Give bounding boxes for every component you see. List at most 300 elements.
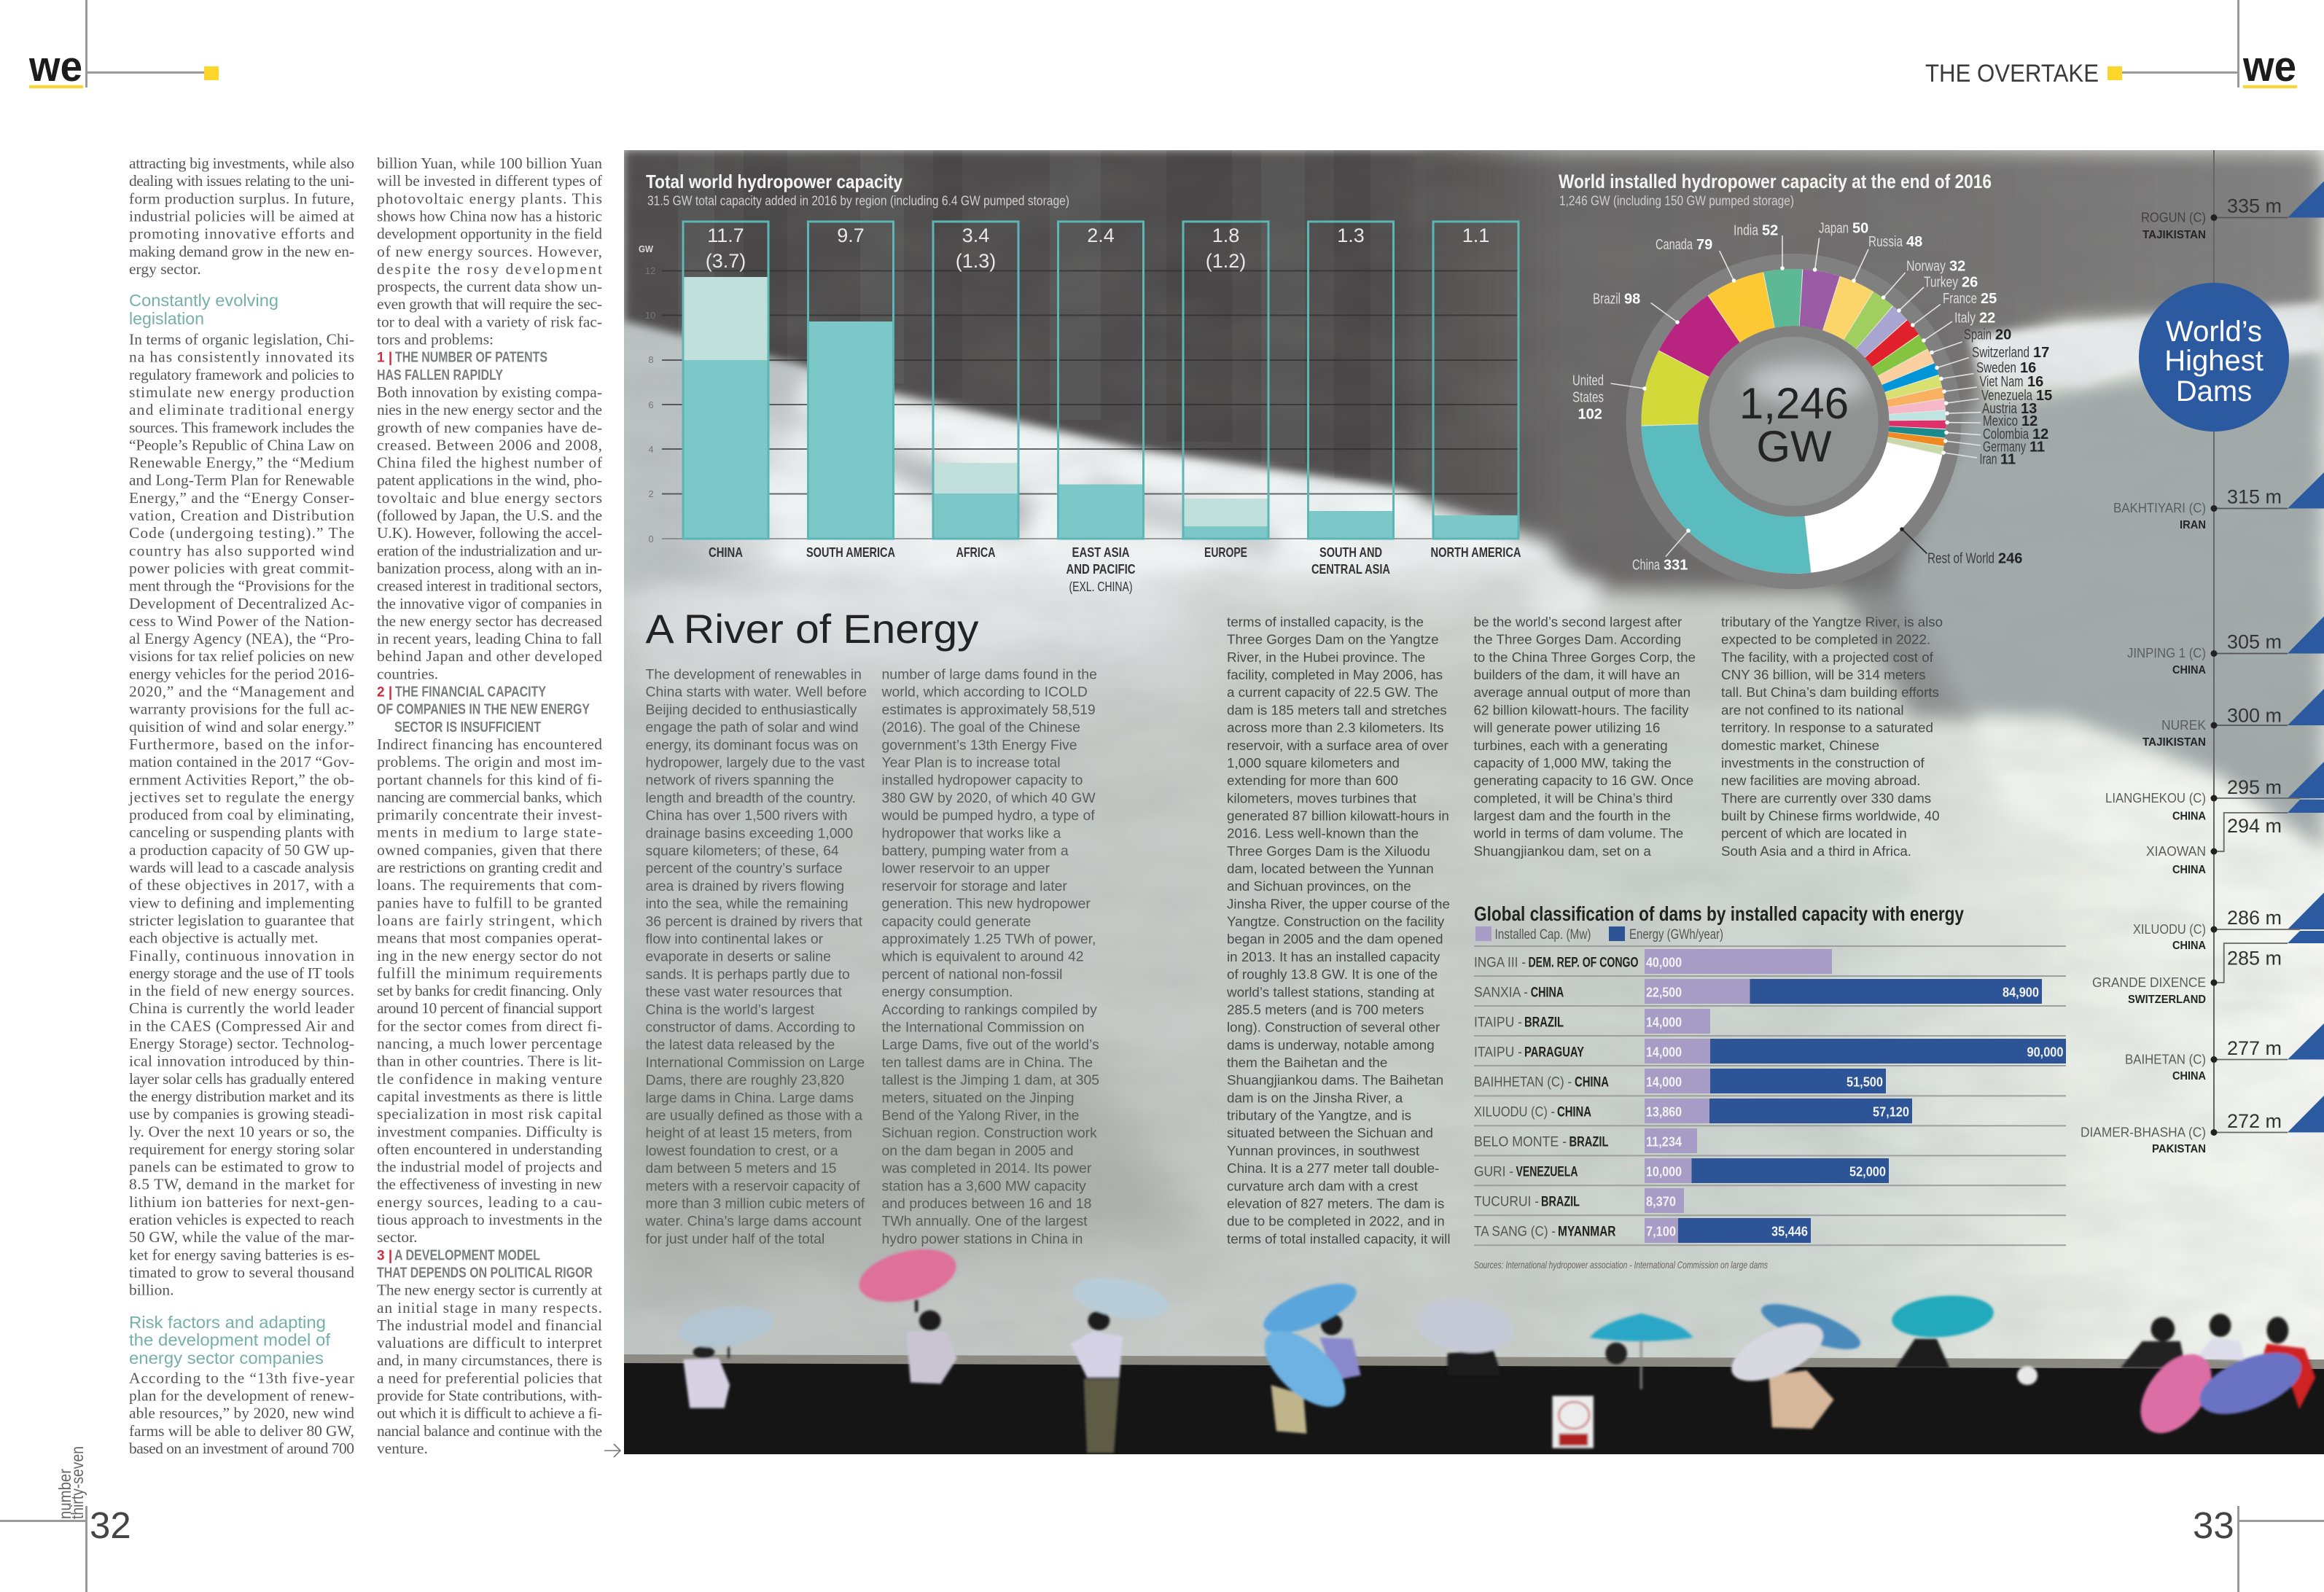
dam: Rogun: TAJIKISTAN — [2142, 229, 2206, 241]
article column 5: There are currently over 330 dams — [1721, 790, 1931, 805]
text block: left page first column: 2020,” and the “Management and — [129, 682, 354, 700]
callout circle: World's Highest Dams: Dams — [2176, 375, 2252, 407]
donut labels: 17 — [2033, 345, 2049, 361]
article column 3: 285.5 meters (and is 700 meters — [1227, 1002, 1424, 1017]
text block: left page second column: venture. — [377, 1440, 428, 1457]
text block: left page first column: each objective is actually met. — [129, 929, 319, 947]
donut labels: Turkey — [1924, 274, 1958, 290]
bar: South America: 9.7 — [837, 225, 865, 246]
row: Guri — [1474, 1158, 1889, 1183]
row: Baihetan: 51,500 — [1847, 1074, 1883, 1089]
text block: left page second column: Indirect financing has encountered — [377, 735, 602, 753]
text block: left page second column: owned companies, given that there — [377, 841, 602, 859]
article column 3: curvature arch dam with a crest — [1227, 1178, 1419, 1193]
article column 3: Yunnan provinces, in southwest — [1227, 1143, 1420, 1158]
article column 2: Year Plan is to increase total — [882, 755, 1061, 771]
bar: South and Central Asia: 1.3 — [1337, 225, 1365, 246]
text block: left page second column: means that most companies operat- — [377, 929, 602, 947]
text block: left page first column: Code (undergoing testing).” The — [129, 524, 354, 542]
bar: Europe: EUROPE — [1204, 545, 1247, 560]
donut labels: India — [1734, 223, 1759, 239]
text block: left page second column: nancing are commercial banks, which — [377, 788, 602, 805]
sources note: Sources: International hydropower association - International Commission on large dams — [1474, 1259, 1768, 1271]
donut labels: Russia — [1868, 234, 1903, 250]
row: Baihetan: CHINA — [1575, 1074, 1609, 1090]
row: Sanxia: SANXIA - — [1474, 986, 1528, 1000]
donut labels: 331 — [1664, 557, 1688, 573]
donut labels: 98 — [1624, 292, 1640, 308]
article column 3: generated 87 billion kilowatt-hours in — [1227, 808, 1449, 823]
text block: left page first column: legislation — [129, 309, 204, 328]
dam: Baihetan — [2125, 1023, 2324, 1082]
text block: left page first column: timated to grow to several thousand — [129, 1264, 354, 1281]
callout circle: World's Highest Dams: World’s — [2166, 316, 2262, 348]
article column 1: Beijing decided to enthusiastically — [646, 702, 857, 718]
text block: left page first column: na has consistently innovated its — [129, 348, 354, 366]
header: right section name and logo — [1925, 0, 2297, 90]
article column 2: world, which according to ICOLD — [881, 684, 1088, 701]
article column 3: Three Gorges Dam on the Yangtze — [1227, 632, 1439, 647]
article column 1: China has over 1,500 rivers with — [646, 808, 847, 824]
dam: Rogun: 335 m — [2227, 195, 2282, 217]
article column 1: 36 percent is drained by rivers that — [646, 913, 863, 929]
donut labels: 26 — [1962, 274, 1978, 290]
article column 2: energy consumption. — [882, 984, 1013, 1000]
article column 5: domestic market, Chinese — [1721, 738, 1879, 753]
chart y axis: 2 — [648, 488, 654, 499]
donut labels: United — [1572, 373, 1604, 389]
row: Ta Sang: 35,446 — [1771, 1225, 1808, 1239]
donut centre total: 1,246 — [1739, 379, 1849, 428]
article column 4: 62 billion kilowatt-hours. The facility — [1474, 702, 1689, 717]
text block: left page first column: ly. Over the next 10 years or so, the — [129, 1123, 354, 1140]
article column 5: CNY 36 billion, will be 314 meters — [1721, 667, 1925, 682]
article column 4: Shuangjiankou dam, set on a — [1474, 843, 1651, 859]
text block: left page first column: 50 GW, while the value of the mar- — [129, 1228, 354, 1246]
dam: Nurek: TAJIKISTAN — [2142, 736, 2206, 749]
dam: Lianghekou: 295 m — [2227, 776, 2282, 798]
row: Ta Sang: 7,100 — [1646, 1225, 1676, 1239]
donut labels: Brazil — [1593, 292, 1621, 308]
text block: left page first column: produced from coal by eliminating, — [129, 806, 354, 824]
bar: South and Central Asia: SOUTH AND — [1319, 545, 1382, 560]
article column 2: battery, pumping water from a — [882, 843, 1069, 859]
text block: left page second column: are restrictions on granting credit and — [377, 859, 602, 876]
article column 4: to the China Three Gorges Corp, the — [1474, 649, 1696, 665]
article column 1: dam between 5 meters and 15 — [646, 1160, 836, 1177]
text block: left page first column: view to defining and implementing — [129, 894, 354, 911]
text block: left page second column: creased. Between 2006 and 2008, — [377, 436, 602, 453]
bar: Europe: (1.2) — [1206, 250, 1246, 272]
text block: left page first column: the development model of — [129, 1330, 330, 1349]
dam: Xiaowan: 294 m — [2227, 815, 2282, 837]
chart y axis: 0 — [648, 534, 654, 545]
text block: left page second column: often encountered in understanding — [377, 1140, 602, 1158]
article column 3: and Sichuan provinces, on the — [1227, 878, 1411, 894]
row: Baihetan — [1474, 1069, 1886, 1093]
text block: left page first column: Development of Decentralized Ac- — [129, 595, 354, 612]
text block: left page second column: ing in the new energy sector do not — [377, 947, 602, 964]
text block: left page first column: sources. This framework includes the — [129, 418, 354, 436]
text block: left page second column: shows how China now has a historic — [377, 207, 602, 225]
text block: left page first column: and eliminate traditional energy — [129, 401, 354, 418]
text block: left page second column: loans. The requirements that com- — [377, 876, 602, 894]
row: Itaipu Brazil: BRAZIL — [1524, 1015, 1564, 1031]
article column 4: average annual output of more than — [1474, 684, 1691, 700]
text block: left page second column: despite the rosy development — [377, 260, 602, 278]
row: Inga III: INGA III - — [1474, 955, 1526, 971]
text block: left page first column: stimulate new energy production — [129, 383, 354, 401]
row: Ta Sang — [1474, 1218, 1811, 1243]
article column 3: reservoir, with a surface area of over — [1227, 738, 1448, 753]
article column 1: meters with a reservoir capacity of — [646, 1178, 860, 1194]
article column 1: Dams, there are roughly 23,820 — [646, 1072, 844, 1088]
chart heading and legend: Energy (GWh/year) — [1629, 927, 1723, 943]
pair with blue umbrellas — [1252, 1273, 1362, 1434]
text block: left page second column: ments in medium to large state- — [377, 824, 602, 841]
text block: left page second column: The industrial model and financial — [377, 1316, 602, 1334]
text block: left page first column: panels can be estimated to grow to — [129, 1158, 354, 1176]
article column 2: estimates is approximately 58,519 — [882, 702, 1096, 718]
text block: left page second column: U.K). However, following the accel- — [377, 524, 602, 542]
article column 1: flow into continental lakes or — [646, 932, 824, 948]
article column 3: terms of installed capacity, is the — [1227, 614, 1424, 630]
row: Xiluodu: 57,120 — [1873, 1105, 1909, 1120]
donut title — [1559, 171, 1992, 208]
donut labels: 12 — [2032, 426, 2048, 442]
bar: Africa: AFRICA — [956, 545, 996, 560]
bar: China — [683, 222, 768, 560]
article column 2: 380 GW by 2020, of which 40 GW — [882, 790, 1096, 806]
text block: left page second column: 1 | — [377, 351, 392, 366]
dam: Xiaowan: CHINA — [2172, 864, 2206, 876]
dam: Diamer-Bhasha: DIAMER-BHASHA (C) — [2081, 1125, 2206, 1140]
dam: Baihetan: 277 m — [2227, 1037, 2282, 1059]
text block: left page first column: a production capacity of 50 GW up- — [129, 841, 354, 859]
person with pink umbrella — [854, 1241, 962, 1384]
text block: left page first column: making demand grow in the new en- — [129, 243, 354, 260]
text block: left page second column: 3 | — [377, 1248, 392, 1263]
header: left logo and rule — [28, 0, 219, 90]
donut labels: Germany — [1983, 439, 2026, 455]
donut labels: 11 — [2029, 439, 2045, 455]
person with teal umbrella — [1890, 1292, 1995, 1368]
text block: left page first column: promoting innovative efforts and — [129, 225, 354, 243]
article column 2: ten tallest dams are in China. The — [882, 1055, 1093, 1071]
article column 1: more than 3 million cubic meters of — [646, 1196, 865, 1212]
text block: left page second column: HAS FALLEN RAPIDLY — [377, 367, 504, 383]
text block: left page first column: Furthermore, based on the infor- — [129, 735, 354, 753]
text block: left page first column: energy vehicles for the period 2016- — [129, 665, 354, 682]
dam: Jinping 1: CHINA — [2172, 664, 2206, 676]
bar: China: (3.7) — [706, 250, 746, 272]
text block: left page second column: of new energy sources. However, — [377, 243, 602, 260]
text block: left page second column: countries. — [377, 665, 438, 682]
dam: Diamer-Bhasha: PAKISTAN — [2152, 1143, 2206, 1155]
text block: left page first column: “People’s Republic of China Law on — [129, 436, 354, 453]
dam: Lianghekou: LIANGHEKOU (C) — [2105, 791, 2206, 805]
text block: left page second column: out which it is difficult to achieve a fi- — [377, 1405, 602, 1422]
row: Tucurui: BRAZIL — [1541, 1194, 1580, 1210]
chart y axis: 10 — [645, 310, 655, 321]
bar: East Asia and Pacific: 2.4 — [1087, 225, 1115, 246]
text block: left page first column: Constantly evolving — [129, 291, 278, 310]
article column 2: Sichuan region. Construction work — [882, 1125, 1097, 1142]
text block: left page first column: visions for tax relief policies on new — [129, 647, 354, 665]
text block: left page second column — [377, 155, 603, 1457]
text block: left page first column: In terms of organic legislation, Chi- — [129, 331, 354, 348]
text block: left page first column: China is currently the world leader — [129, 999, 354, 1017]
donut labels: 12 — [2021, 413, 2038, 429]
donut labels: 20 — [1995, 327, 2011, 343]
article column 3: a current capacity of 22.5 GW. The — [1227, 684, 1438, 700]
dam: Lianghekou — [2105, 762, 2324, 822]
text block: left page first column: Energy Storage) sector. Technolog- — [129, 1035, 354, 1053]
dam: Rogun — [2141, 181, 2324, 241]
row: Itaipu Paraguay: 14,000 — [1646, 1045, 1682, 1060]
chart y axis: 6 — [648, 399, 654, 410]
donut labels: 16 — [2020, 360, 2036, 376]
text block: left page second column: energy sources, leading to a cau- — [377, 1193, 602, 1211]
text block: left page second column: specialization in most risk capital — [377, 1105, 602, 1123]
article column 2: was completed in 2014. Its power — [881, 1160, 1092, 1177]
dam: Nurek: 300 m — [2227, 704, 2282, 726]
text block: left page second column: tor to deal with a variety of risk fac- — [377, 313, 602, 330]
article column 1: International Commission on Large — [646, 1055, 865, 1071]
text block: left page first column: Finally, continuous innovation in — [129, 947, 354, 964]
photo: visitors with umbrellas on the dam wall — [676, 1241, 2315, 1453]
article column 3: due to be completed in 2022, and in — [1227, 1214, 1445, 1229]
person with white and red umbrella — [1414, 1293, 1516, 1376]
dam: Xiluodu: CHINA — [2172, 940, 2206, 952]
header: left logo and rule: we — [28, 43, 82, 90]
bar: South America: SOUTH AMERICA — [806, 545, 895, 560]
article column 5: are not confined to its national — [1721, 702, 1904, 717]
article column 2: reservoir for storage and later — [882, 878, 1067, 894]
donut labels: 79 — [1696, 237, 1712, 253]
bar: Europe — [1183, 222, 1268, 560]
text block: left page first column: Risk factors and adapting — [129, 1313, 326, 1332]
text block: left page first column: form production surplus. In future, — [129, 190, 354, 207]
article column 3: tributary of the Yangtze, and is — [1227, 1108, 1411, 1123]
text block: left page second column: Both innovation by existing compa- — [377, 383, 602, 401]
text block: left page first column: and Long-Term Plan for Renewable — [129, 472, 354, 489]
bar: East Asia and Pacific: (EXL. CHINA) — [1069, 580, 1133, 594]
dam: Lianghekou: CHINA — [2172, 811, 2206, 822]
dam: Bakhtiyari: IRAN — [2180, 519, 2206, 531]
dam: Bakhtiyari: 315 m — [2227, 485, 2282, 507]
text block: left page first column: industrial policies will be aimed at — [129, 207, 354, 225]
text block: left page second column: THE NUMBER OF PATENTS — [395, 350, 547, 366]
donut labels: Spain — [1964, 327, 1992, 343]
chart y axis: GW — [639, 243, 654, 254]
text block: left page first column: in the CAES (Compressed Air and — [129, 1017, 354, 1034]
article column 1: engage the path of solar and wind — [646, 719, 859, 735]
row: Guri: 52,000 — [1849, 1165, 1886, 1179]
text block: left page second column: the innovative vigor of companies in — [377, 595, 602, 612]
text block: left page first column: based on an investment of around 700 — [129, 1440, 354, 1457]
bar: North America — [1430, 222, 1521, 560]
text block: left page second column: creased interest in traditional sectors, — [377, 577, 602, 595]
text block: left page first column: of these objectives in 2017, with a — [129, 876, 354, 894]
donut centre total — [1739, 379, 1849, 471]
row: Ta Sang: TA SANG (C) - — [1474, 1225, 1556, 1239]
article column 3: Jinsha River, the upper course of the — [1227, 896, 1450, 911]
donut labels: 50 — [1852, 220, 1868, 236]
text block: left page first column: al Energy Agency (NEA), the “Pro- — [129, 630, 354, 647]
article column 3: Three Gorges Dam is the Xiluodu — [1227, 843, 1430, 859]
article column 1: hydropower, largely due to the vast — [646, 755, 865, 771]
text block: left page second column: set by banks for credit financing. Only — [377, 982, 602, 999]
row: Sanxia — [1474, 979, 2042, 1004]
bar: Africa: 3.4 — [962, 225, 989, 246]
article column 1: constructor of dams. According to — [646, 1020, 855, 1036]
text block: left page second column: China filed the highest number of — [377, 454, 603, 472]
article column 2: capacity could generate — [882, 913, 1031, 929]
text block: left page second column: (followed by Japan, the U.S. and the — [377, 507, 602, 524]
text block: left page second column: the new energy sector has decreased — [377, 612, 602, 630]
article column 4: builders of the dam, it will have an — [1474, 667, 1680, 682]
dam: Diamer-Bhasha: 272 m — [2227, 1110, 2282, 1132]
article column 2: (2016). The goal of the Chinese — [882, 719, 1080, 735]
text block: left page second column: primarily concentrate their invest- — [377, 806, 602, 824]
donut labels: States — [1572, 389, 1604, 405]
footer: left folio with issue number: 32 — [90, 1505, 131, 1546]
donut labels — [1572, 220, 2052, 573]
text block: left page second column: a need for preferential policies that — [377, 1369, 602, 1386]
dam: Bakhtiyari — [2113, 472, 2324, 531]
dam: Xiluodu: XILUODU (C) — [2133, 922, 2206, 937]
article column 1: are usually defined as those with a — [646, 1108, 862, 1124]
text block: left page second column: than in other countries. There is lit- — [377, 1053, 602, 1070]
donut labels: Austria — [1982, 401, 2018, 417]
row: Itaipu Paraguay: PARAGUAY — [1524, 1045, 1584, 1060]
donut labels: 102 — [1578, 407, 1602, 423]
footer: left folio with issue number — [0, 1446, 131, 1592]
row: Inga III: DEM. REP. OF CONGO — [1528, 955, 1639, 971]
text block: left page first column: 8.5 TW, demand in the market for — [129, 1176, 354, 1193]
bar: China: CHINA — [709, 545, 743, 560]
donut labels: Mexico — [1983, 413, 2018, 429]
text block: left page first column: energy storage and the use of IT tools — [129, 964, 354, 982]
text block: left page first column: Renewable Energy,” the “Medium — [129, 454, 354, 472]
row: Inga III: 40,000 — [1646, 955, 1682, 969]
donut centre total: GW — [1756, 422, 1832, 471]
row: Tucurui: TUCURUI - — [1474, 1194, 1539, 1210]
text block: left page first column: canceling or suspending plants with — [129, 824, 354, 841]
article column 3: facility, completed in May 2006, has — [1227, 667, 1443, 682]
article column 1: length and breadth of the country. — [646, 790, 856, 806]
text block: left page second column: the effectiveness of investing in new — [377, 1176, 602, 1193]
article column 3: them the Baihetan and the — [1227, 1055, 1387, 1070]
text block: left page second column: THAT DEPENDS ON POLITICAL RIGOR — [377, 1265, 593, 1281]
chart: world's highest dams — [2081, 150, 2324, 1155]
article column 2: station has a 3,600 MW capacity — [882, 1178, 1086, 1194]
couple with blue and white umbrellas — [1723, 1295, 1865, 1429]
article column 1: percent of the country’s surface — [646, 861, 843, 877]
article column 2: and produces between 16 and 18 — [882, 1196, 1091, 1212]
text block: left page second column: patent applications in the wind, pho- — [377, 472, 602, 489]
donut labels: Viet Nam — [1980, 374, 2024, 390]
dam: Grande Dixence: SWITZERLAND — [2128, 994, 2206, 1006]
donut labels: Sweden — [1976, 360, 2016, 376]
heading: A River of Energy: A River of Energy — [646, 606, 978, 652]
text block: left page second column: capital investments as there is little — [377, 1088, 602, 1105]
donut labels: Japan — [1819, 220, 1849, 236]
bar: South America — [806, 222, 895, 560]
row: Baihetan: BAIHHETAN (C) - — [1474, 1074, 1572, 1090]
chart title: Total world hydropower capacity — [646, 171, 902, 192]
article column 3: Shuangjiankou dams. The Baihetan — [1227, 1072, 1443, 1088]
article column 2: which is equivalent to around 42 — [881, 949, 1084, 965]
text block: left page first column: ergy sector. — [129, 260, 201, 278]
row: Itaipu Brazil: 14,000 — [1646, 1015, 1682, 1029]
article column 3: dam, located between the Yunnan — [1227, 861, 1434, 876]
article column 2: would be pumped hydro, a type of — [881, 808, 1095, 824]
article column 4: generating capacity to 16 GW. Once — [1474, 773, 1693, 788]
footer: left folio with issue number: number — [55, 1469, 74, 1519]
article column 2: on the dam began in 2005 and — [882, 1143, 1074, 1159]
text block: left page first column: able resources,” by 2020, new wind — [129, 1405, 354, 1422]
callout circle: World's Highest Dams: Highest — [2164, 345, 2263, 377]
article column 1: into the sea, while the remaining — [646, 896, 849, 912]
panel: dam photograph background — [624, 150, 2324, 1454]
text block: left page second column: tovoltaic and blue energy sectors — [377, 489, 602, 507]
text block: left page second column: billion Yuan, while 100 billion Yuan — [377, 155, 602, 172]
dam: Nurek: NUREK — [2161, 718, 2206, 733]
article column 1: square kilometers; of these, 64 — [646, 843, 839, 859]
article column 1: water. China’s large dams account — [644, 1214, 862, 1230]
text block: left page second column: and, in many circumstances, there is — [377, 1351, 602, 1369]
text block: left page second column: around 10 percent of financial support — [377, 999, 602, 1017]
dam: Grande Dixence: GRANDE DIXENCE — [2092, 975, 2206, 990]
row: Itaipu Paraguay — [1474, 1039, 2066, 1064]
article column 2: generation. This new hydropower — [882, 896, 1091, 912]
callout circle: World's Highest Dams — [2139, 283, 2289, 432]
person with small cyan umbrella — [1590, 1314, 1693, 1389]
article column 3: River, in the Hubei province. The — [1227, 649, 1425, 665]
chart title: 31.5 GW total capacity added in 2016 by region (including 6.4 GW pumped storage) — [647, 194, 1069, 208]
row: Tucurui: 8,370 — [1646, 1194, 1676, 1209]
article column 2: hydropower that works like a — [882, 825, 1061, 841]
article column 4: be the world’s second largest after — [1474, 614, 1682, 630]
row: Guri: 10,000 — [1646, 1165, 1682, 1179]
dam: Nurek — [2142, 689, 2324, 749]
text block: left page second column: A DEVELOPMENT MODEL — [394, 1247, 540, 1263]
text block: left page first column: vation, Creation and Distribution — [129, 507, 354, 524]
text block: left page first column: wards will lead to a cascade analysis — [129, 859, 354, 876]
article column 1: for just under half of the total — [646, 1231, 824, 1247]
text block: left page first column: layer solar cells has gradually entered — [129, 1070, 354, 1088]
text block: left page second column: the industrial model of projects and — [377, 1158, 602, 1176]
text block: left page first column: regulatory framework and policies to — [129, 366, 354, 383]
text block: left page second column: behind Japan and other developed — [377, 647, 602, 665]
text block: left page second column: development opportunity in the field — [377, 225, 602, 243]
header: right section name and logo: we — [2242, 43, 2296, 90]
text block: left page first column: According to the “13th five-year — [129, 1369, 354, 1386]
row: Belo Monte: BELO MONTE - — [1474, 1134, 1567, 1150]
footer: right folio — [2193, 1505, 2324, 1592]
article column 2: government’s 13th Energy Five — [882, 737, 1077, 753]
text block: left page second column: OF COMPANIES IN THE NEW ENERGY — [377, 702, 590, 718]
donut labels: France — [1943, 291, 1977, 307]
text block: left page second column: nancial balance and continue with the — [377, 1422, 602, 1440]
article column 4: the Three Gorges Dam. According — [1474, 632, 1681, 647]
article column 3: China. It is a 277 meter tall double- — [1227, 1160, 1439, 1176]
article column 2: approximately 1.25 TWh of power, — [882, 932, 1096, 948]
donut labels: 22 — [1979, 311, 1995, 327]
article column 1: the latest data released by the — [646, 1037, 835, 1053]
